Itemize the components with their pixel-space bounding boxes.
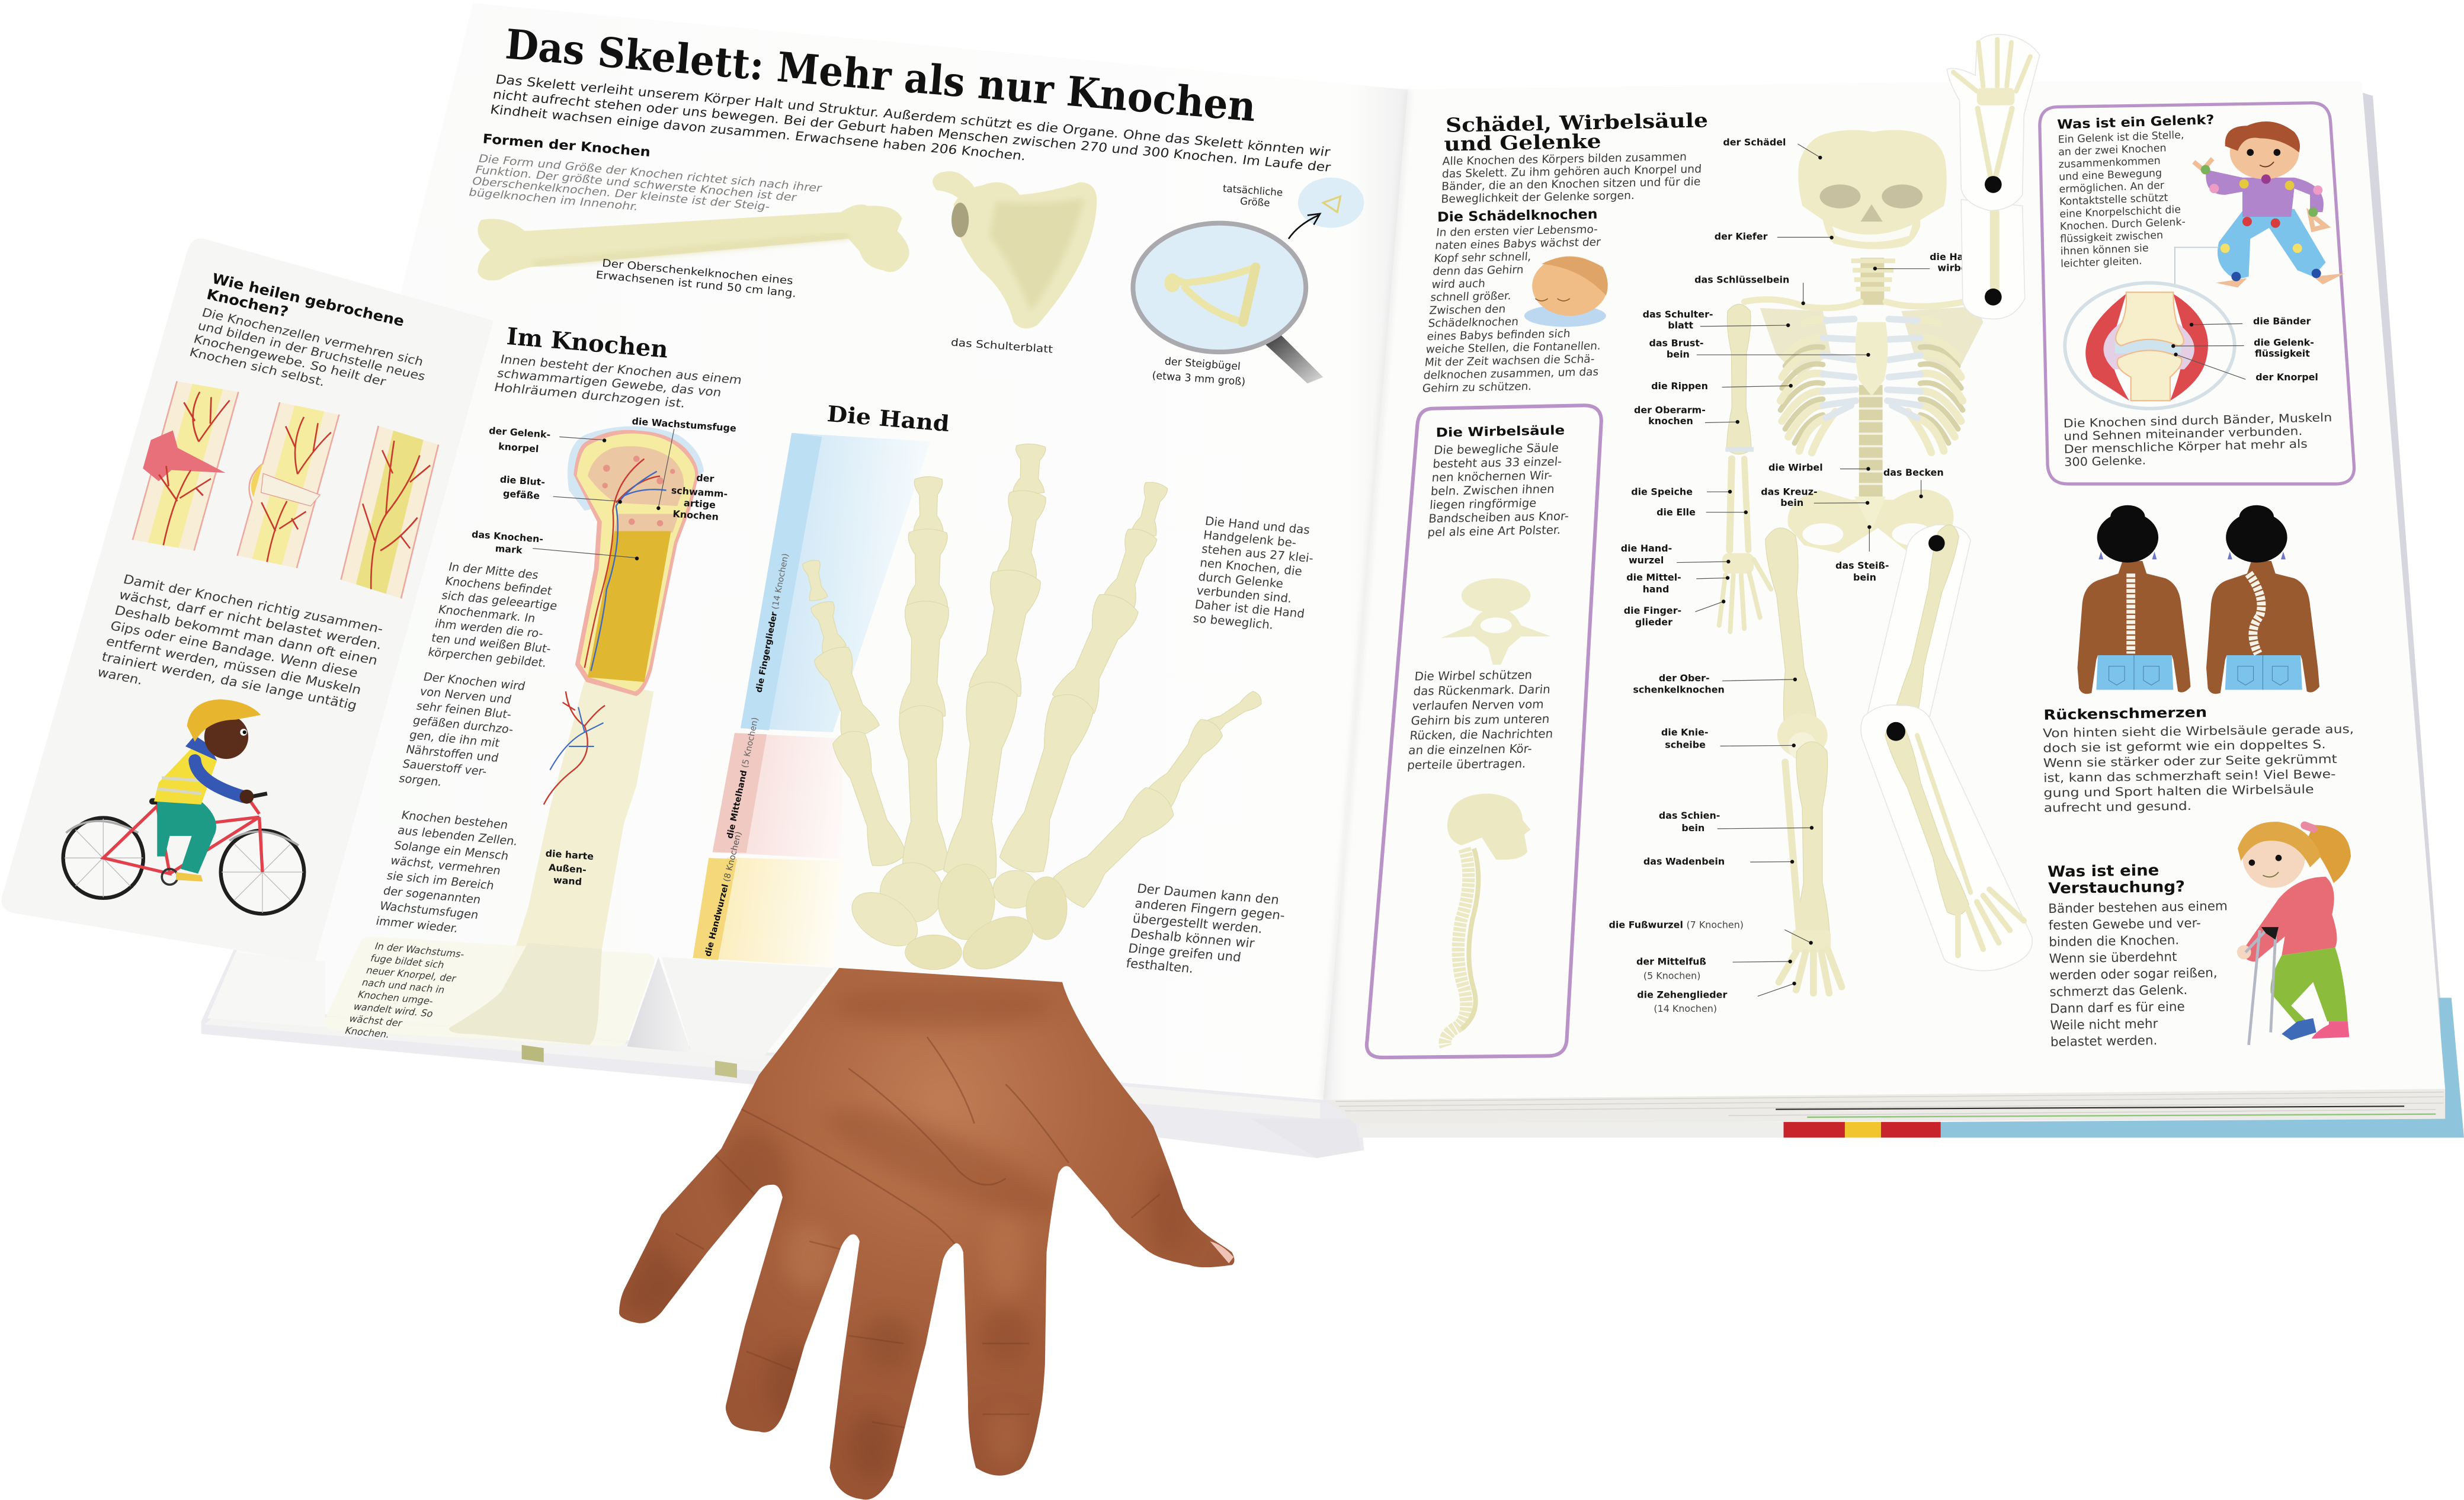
blood vessels in head xyxy=(585,459,660,668)
colour bands: hand regions xyxy=(693,433,930,966)
heading: Schädel, Wirbelsäule und Gelenke: Schädel, Wirbelsäule xyxy=(1446,108,1708,137)
text: Die Schädelknochen: delknochen zusammen, um das xyxy=(1423,366,1599,382)
joint labels xyxy=(2171,316,2318,383)
text: verlaufen Nerven vom xyxy=(1412,697,1545,713)
text: Knochenmark xyxy=(427,560,569,670)
text: Rückenschmerzen: aufrecht und gesund. xyxy=(2044,799,2191,815)
text: pel als eine Art Polster. xyxy=(1427,523,1561,539)
skeleton labels: das Schlüsselbein xyxy=(1694,274,1789,285)
text: perteile übertragen. xyxy=(1406,757,1526,772)
text: das Rückenmark. Darin xyxy=(1413,682,1551,698)
text: Verstauchung: festen Gewebe und ver- xyxy=(2049,916,2201,933)
text: ermöglichen. An der xyxy=(2059,180,2165,195)
heading: Was ist eine Verstauchung: Was ist eine xyxy=(2048,861,2159,881)
text: Die Knochen sind durch Bänder, Muskeln xyxy=(2063,411,2332,430)
text xyxy=(2063,411,2333,469)
text: Nerven: Nährstoffen und xyxy=(405,742,500,765)
arrow to actual size xyxy=(1289,214,1320,239)
after-care text: waren. xyxy=(95,665,145,688)
flap: Wie heilen gebrochene Knochen xyxy=(1,238,494,963)
pelvis xyxy=(1788,489,1953,553)
text: Verstauchung: belastet werden. xyxy=(2050,1033,2158,1050)
bone: femur xyxy=(478,204,909,280)
movable flaps: leg xyxy=(1861,523,2032,971)
text: Die Hand und das Handgelenk: nen Knochen, die xyxy=(1199,556,1303,578)
cyclist illustration xyxy=(63,699,304,914)
clavicle xyxy=(1744,299,1965,308)
text: Die Schädelknochen: weiche Stellen, die Fontanellen. xyxy=(1425,340,1601,356)
healing stage 2 xyxy=(230,400,342,569)
text: lebende Zellen: Wachstumsfugen xyxy=(378,899,480,922)
skeleton labels: bein xyxy=(1667,349,1690,360)
pull tab with bone: nach und nach in xyxy=(360,977,447,995)
text xyxy=(1406,668,1558,772)
text: Die Hand und das Handgelenk: durch Gelenke xyxy=(1197,570,1284,591)
heading: Rückenschmerzen: Rückenschmerzen xyxy=(2043,704,2207,723)
text: nen knöchernen Wir- xyxy=(1431,469,1553,485)
text: Knochenmark: sich das geleeartige xyxy=(440,588,559,613)
text: Verstauchung: Bänder bestehen aus einem xyxy=(2048,899,2228,916)
outer bone edge xyxy=(573,430,698,696)
skeleton xyxy=(1719,130,1983,993)
pants xyxy=(157,802,216,874)
text: lebende Zellen: Solange ein Mensch xyxy=(393,838,510,863)
skeleton labels xyxy=(1609,136,1976,1014)
joint labels: die Bänder xyxy=(2253,316,2311,327)
text: an der zwei Knochen xyxy=(2058,142,2167,158)
healing text: und bilden in der Bruchstelle neues xyxy=(196,319,427,383)
skeleton labels: die Hals- xyxy=(1930,251,1976,262)
arm xyxy=(195,761,243,797)
text: lebende Zellen: Knochen bestehen xyxy=(400,808,510,832)
healing stage 1 xyxy=(123,380,248,552)
text: Knochenmark: ten und weißen Blut- xyxy=(430,631,552,656)
text: Alle Knochen: das Skelett. Zu ihm gehören auch Knorpel und xyxy=(1442,163,1702,181)
bone shaft xyxy=(449,680,653,1045)
labels: hand regions: die Fingerglieder (14 Knochen) xyxy=(754,553,791,693)
text: Die Hand und das Handgelenk: so beweglich. xyxy=(1193,611,1274,632)
skeleton labels: schenkelknochen xyxy=(1633,684,1725,695)
book cover and page stack: left xyxy=(201,949,1364,1158)
text: liegen ringförmige xyxy=(1429,496,1537,512)
after-care text: trainiert werden, da sie lange untätig xyxy=(100,649,358,713)
title: Das Skelett: Mehr als nur Knochen xyxy=(504,20,1258,131)
text: Die Hand und das Handgelenk xyxy=(1193,514,1318,634)
labels: bone cross section: mark xyxy=(495,543,523,556)
caption: femur: Der Oberschenkelknochen eines xyxy=(601,258,793,287)
text: Verstauchung: Dann darf es für eine xyxy=(2050,999,2185,1017)
text: Formen der Knochen: bügelknochen im Innenohr. xyxy=(467,187,640,213)
sternum xyxy=(1856,322,1888,396)
yellow layer xyxy=(576,434,695,691)
text: lebende Zellen: aus lebenden Zellen. xyxy=(396,823,519,848)
text: lebende Zellen: sie sich im Bereich xyxy=(386,868,495,892)
heading: Die Wirbelsäule xyxy=(1436,423,1565,440)
skeleton labels: bein xyxy=(1780,497,1803,508)
skeleton labels: die Elle xyxy=(1656,507,1696,518)
text: Verstauchung xyxy=(2048,899,2230,1050)
pull tab with bone xyxy=(325,937,655,1047)
actual-size circle with stapes xyxy=(1298,178,1364,228)
vertebra xyxy=(1441,578,1551,665)
text: lebende Zellen: wächst, vermehren xyxy=(389,854,502,877)
text: eine Knorpelschicht die xyxy=(2059,204,2181,220)
text: lebende Zellen: immer wieder. xyxy=(374,914,460,935)
cartilage cap xyxy=(568,426,704,511)
illustration: back straight spine xyxy=(2078,505,2190,694)
pull tab with bone: fuge bildet sich xyxy=(369,953,446,970)
text: Nerven: gen, die ihn mit xyxy=(408,728,501,750)
text: Alle Knochen: Beweglichkeit der Gelenke sorgen. xyxy=(1441,190,1635,206)
text: Knochen. Durch Gelenk- xyxy=(2060,216,2186,233)
text: Die Schädelknochen: Zwischen den xyxy=(1429,303,1506,317)
text: an die einzelnen Kör- xyxy=(1408,742,1533,757)
text: Nerven: sorgen. xyxy=(398,771,443,789)
text: Alle Knochen: Alle Knochen des Körpers bilden zusammen xyxy=(1442,151,1687,168)
skeleton labels: die Speiche xyxy=(1631,486,1693,498)
text: Rückenschmerzen: ist, kann das schmerzhaft sein! Viel Bewe- xyxy=(2043,767,2336,785)
healing stage 3 xyxy=(341,426,438,598)
labels: bone cross section: knorpel xyxy=(498,441,539,454)
text: Nerven: von Nerven und xyxy=(418,684,513,707)
left arm xyxy=(1726,305,1751,454)
skeleton labels: die Finger- xyxy=(1624,605,1681,616)
text: Nerven: gefäßen durchzo- xyxy=(412,713,515,736)
text: Verstauchung: werden oder sogar reißen, xyxy=(2049,966,2218,983)
left leg xyxy=(1763,526,1818,735)
icon: baby head xyxy=(1524,256,1608,327)
text: Knochenmark: körperchen gebildet. xyxy=(427,645,548,670)
skeleton labels: der Mittelfuß xyxy=(1636,956,1706,967)
vest xyxy=(154,746,217,805)
palm creases xyxy=(739,1037,1069,1249)
text: Verstauchung: Weile nicht mehr xyxy=(2050,1017,2158,1033)
text: Formen der Knochen: Oberschenkelknochen. Der kleinste ist der Steig- xyxy=(470,175,771,213)
text: Knochenmark: Knochenmark. In xyxy=(437,602,537,625)
text: Im Knochen xyxy=(493,352,744,415)
text: Die Schädelknochen: eines Babys befinden sich xyxy=(1427,328,1571,343)
skin shading xyxy=(621,983,1193,1480)
text: und eine Bewegung xyxy=(2059,168,2162,183)
skeleton labels: das Wadenbein xyxy=(1643,855,1725,867)
book cover edge: right xyxy=(1359,91,2464,1137)
skeleton labels: das Kreuz- xyxy=(1761,486,1818,498)
text: Der Daumen xyxy=(1125,882,1288,983)
skeleton labels: (5 Knochen) xyxy=(1643,970,1700,981)
skeleton labels: das Schien- xyxy=(1659,810,1720,821)
text: Die Schädelknochen: Mit der Zeit wachsen die Schä- xyxy=(1424,353,1595,369)
caption: femur xyxy=(595,258,797,300)
text: Nerven: sehr feinen Blut- xyxy=(415,699,513,722)
marrow xyxy=(588,531,671,682)
skeleton labels: hand xyxy=(1643,584,1669,595)
skeleton labels: die Zehenglieder xyxy=(1637,989,1727,1000)
panel: bone cross section xyxy=(449,426,704,1045)
pull tab with bone: Knochen umge- xyxy=(356,989,435,1007)
text: Ein Gelenk ist die Stelle, xyxy=(2058,129,2184,146)
label: tatsächliche Größe: tatsächliche xyxy=(1222,182,1283,198)
text: Der Daumen: übergestellt werden. xyxy=(1132,911,1264,937)
skeleton labels: blatt xyxy=(1668,319,1693,331)
text: Alle Knochen: Bänder, die an den Knochen sitzen und für die xyxy=(1441,176,1701,193)
text: Die Hand und das Handgelenk: verbunden sind. xyxy=(1196,584,1293,605)
skeleton labels: das Schulter- xyxy=(1643,309,1713,320)
joint labels: der Knorpel xyxy=(2255,371,2318,383)
text: Im Knochen: schwammartigen Gewebe, das von xyxy=(496,366,723,399)
text: Nerven: Der Knochen wird xyxy=(422,670,527,693)
text: Rückenschmerzen: doch sie ist geformt wie ein doppeltes S. xyxy=(2043,737,2326,755)
text: Rückenschmerzen: Wenn sie stärker oder zur Seite gekrümmt xyxy=(2043,752,2337,770)
text: Knochenmark: Knochens befindet xyxy=(444,574,553,598)
text: flüssigkeit zwischen xyxy=(2060,229,2163,245)
left book page xyxy=(223,3,1408,1100)
skeleton labels: wirbel xyxy=(1937,262,1970,274)
panel: Die Wirbelsäule xyxy=(1367,405,1601,1057)
skeleton labels: das Steiß- xyxy=(1835,560,1889,571)
text: Der Daumen: festhalten. xyxy=(1125,956,1194,976)
text: Verstauchung: schmerzt das Gelenk. xyxy=(2049,983,2187,1000)
skeleton labels: (14 Knochen) xyxy=(1654,1003,1717,1014)
label: die harte Außenwand xyxy=(545,848,594,887)
pull tab with bone: wächst der xyxy=(348,1013,404,1029)
label: die harte Außenwand: wand xyxy=(553,874,582,887)
text: Die Hand und das Handgelenk: Handgelenk be- xyxy=(1203,528,1297,550)
vessels on shaft xyxy=(544,691,605,805)
labels: bone cross section: gefäße xyxy=(502,488,540,501)
pull tab with bone: Knochen. xyxy=(343,1025,392,1040)
hand cut-out xyxy=(619,968,1234,1500)
text: Die Schädelknochen: In den ersten vier Lebensmo- xyxy=(1436,223,1598,239)
text: zusammenkommen xyxy=(2058,155,2161,171)
connector line to joint xyxy=(2175,247,2219,284)
text: 300 Gelenke. xyxy=(2064,454,2146,469)
healing text: Die Knochenzellen vermehren sich xyxy=(200,306,425,369)
skeleton labels: die Wirbel xyxy=(1768,462,1823,473)
text: Im Knochen: Hohlräumen durchzogen ist. xyxy=(493,380,687,411)
text: Gehirn bis zum unteren xyxy=(1411,712,1550,727)
skeleton labels: wurzel xyxy=(1629,555,1664,566)
text: Kontaktstelle schützt xyxy=(2059,192,2168,208)
heading: Was ist eine Verstauchung: Verstauchung? xyxy=(2048,878,2185,898)
text: Der Daumen: Der Daumen kann den xyxy=(1136,882,1280,908)
text: Rückenschmerzen: Von hinten sieht die Wirbelsäule gerade aus, xyxy=(2043,722,2354,741)
pull tab with bone: wandelt wird. So xyxy=(352,1001,435,1020)
text: Nerven xyxy=(398,670,527,794)
text: Formen der Knochen xyxy=(467,153,824,229)
text: Die Hand und das Handgelenk: stehen aus 27 klei- xyxy=(1201,542,1314,565)
text: beln. Zwischen ihnen xyxy=(1430,482,1555,498)
label: der Steigbügel: (etwa 3 mm groß) xyxy=(1152,370,1246,388)
skull xyxy=(1798,130,1947,249)
healing text: Knochen sich selbst. xyxy=(188,345,327,389)
labels: bone cross section: die Blut- xyxy=(499,473,546,488)
intro text: Kindheit wachsen einige davon zusammen. Erwachsene haben 206 Knochen. xyxy=(489,102,1027,163)
text: Die Schädelknochen xyxy=(1422,223,1612,395)
hand slot fold xyxy=(207,952,834,1060)
labels: bone cross section xyxy=(471,415,737,560)
labels: bone cross section: die Wachstumsfuge xyxy=(632,415,737,434)
head xyxy=(185,735,217,761)
heading: Was ist eine Verstauchung xyxy=(2048,861,2185,898)
text: Rückenschmerzen: gung und Sport halten die Wirbelsäule xyxy=(2043,782,2314,800)
text: Der Daumen: anderen Fingern gegen- xyxy=(1134,896,1286,924)
text: Die Hand und das Handgelenk: Die Hand und das xyxy=(1204,514,1310,537)
skull and spine side view xyxy=(1445,793,1530,1047)
text: Verstauchung: Wenn sie überdehnt xyxy=(2049,950,2177,966)
text: Nerven: Sauerstoff ver- xyxy=(401,757,488,778)
text: Verstauchung: binden die Knochen. xyxy=(2049,933,2179,950)
skeleton labels: knochen xyxy=(1648,415,1693,427)
after-care text: Deshalb bekommt man dann oft einen xyxy=(113,603,379,668)
text: Bandscheiben aus Knor- xyxy=(1428,509,1569,525)
after-care text: wächst, darf er nicht belastet werden. xyxy=(117,588,383,653)
labels: bone cross section: schwamm- xyxy=(671,485,728,500)
intro text: nicht aufrecht stehen oder uns bewegen. Bei der Geburt haben Menschen zwischen 270 und 300 Knochen. Im Laufe der xyxy=(492,87,1332,175)
spongy bone xyxy=(588,446,684,506)
labels: bone cross section: Knochen xyxy=(672,508,719,523)
skeleton labels: der Kiefer xyxy=(1715,230,1768,242)
skeleton labels: der Oberarm- xyxy=(1634,405,1706,416)
text: Die Schädelknochen: denn das Gehirn xyxy=(1432,264,1524,278)
skeleton labels: die Fußwurzel (7 Knochen) xyxy=(1609,919,1744,931)
text: Die Schädelknochen: Schädelknochen xyxy=(1428,316,1519,330)
text: lebende Zellen: der sogenannten xyxy=(382,884,482,906)
text: Die Schädelknochen: wird auch xyxy=(1431,277,1486,291)
skeleton labels: die Rippen xyxy=(1651,380,1708,392)
text: Die Hand und das Handgelenk: Daher ist die Hand xyxy=(1194,598,1305,621)
labels: hand regions: die Handwurzel (8 Knochen) xyxy=(703,831,744,957)
skeleton labels: das Brust- xyxy=(1649,338,1704,349)
right book page xyxy=(1323,82,2445,1100)
text xyxy=(2058,129,2187,270)
heading: Schädel, Wirbelsäule und Gelenke xyxy=(1444,108,1708,156)
heading: Formen der Knochen: Formen der Knochen xyxy=(482,132,651,160)
skeleton labels: die Knie- xyxy=(1661,726,1709,738)
after-care text: Damit der Knochen richtig zusammen- xyxy=(121,572,385,637)
neck vertebrae xyxy=(1860,258,1884,305)
spine xyxy=(1859,385,1883,498)
skeleton labels: bein xyxy=(1853,572,1876,583)
joint illustration xyxy=(2065,283,2235,409)
labels: hand regions: die Mittelhand (5 Knochen) xyxy=(725,716,760,839)
text: Formen der Knochen: Die Form und Größe der Knochen richtet sich nach ihrer xyxy=(477,153,824,195)
text: Knochenmark: In der Mitte des xyxy=(447,560,540,582)
text: Formen der Knochen: Funktion. Der größte und schwerste Knochen ist der xyxy=(474,164,798,204)
label: der Steigbügel xyxy=(1152,355,1246,388)
after-care text: Gips oder eine Bandage. Wenn diese xyxy=(108,618,360,681)
text: Rücken, die Nachrichten xyxy=(1409,727,1553,742)
skeleton labels: der Ober- xyxy=(1659,672,1710,684)
skeleton labels: der Schädel xyxy=(1723,136,1786,148)
skeleton labels: die Mittel- xyxy=(1626,572,1681,583)
heading: Wie heilen gebrochene xyxy=(210,270,406,330)
intro text: Das Skelett verleiht unserem Körper Halt und Struktur. Außerdem schützt es die Organe. Ohne das Skelett könnten wir xyxy=(495,72,1332,159)
text: Die Schädelknochen: naten eines Babys wächst der xyxy=(1434,236,1601,252)
heading: Die Schädelknochen: Die Schädelknochen xyxy=(1437,207,1598,225)
caption: femur: Erwachsenen ist rund 50 cm lang. xyxy=(595,270,797,300)
text: Der Daumen: Dinge greifen und xyxy=(1127,941,1242,965)
scapula xyxy=(1760,306,1983,377)
text: Die Schädelknochen: Kopf sehr schnell, xyxy=(1433,251,1531,265)
illustration: back curved spine xyxy=(2206,505,2319,694)
after-care text: entfernt werden, müssen die Muskeln xyxy=(104,634,363,698)
label: tatsächliche Größe xyxy=(1222,182,1283,209)
healing text: Knochengewebe. So heilt der xyxy=(192,332,388,389)
labels: bone cross section: der Gelenk- xyxy=(489,425,551,440)
text: Knochenmark: ihm werden die ro- xyxy=(434,617,544,640)
labels: bone cross section: das Knochen- xyxy=(471,528,544,545)
skeleton labels: bein xyxy=(1681,822,1704,834)
label: tatsächliche Größe: Größe xyxy=(1239,195,1270,209)
gutter shadow xyxy=(1323,89,1408,1100)
text: Alle Knochen xyxy=(1441,150,1702,206)
pull tab with bone: neuer Knorpel, der xyxy=(365,964,458,984)
label: der Steigbügel: der Steigbügel xyxy=(1164,355,1241,373)
pull tab with bone: In der Wachstums- xyxy=(373,941,466,960)
text: ihnen können sie xyxy=(2061,242,2149,258)
skeleton labels: das Becken xyxy=(1883,467,1944,478)
illustration: girl on crutches xyxy=(2237,820,2351,1045)
text: Die Wirbel schützen xyxy=(1414,668,1533,683)
intro text xyxy=(489,72,1335,190)
text xyxy=(1427,441,1575,539)
text: Im Knochen: Innen besteht der Knochen aus einem xyxy=(499,352,744,387)
text: Die Schädelknochen: Gehirn zu schützen. xyxy=(1422,380,1532,395)
text: Der Daumen: Deshalb können wir xyxy=(1129,926,1255,951)
text: und Sehnen miteinander verbunden. xyxy=(2064,424,2303,443)
text: besteht aus 33 einzel- xyxy=(1433,454,1562,471)
after-care text xyxy=(95,572,388,730)
bone: shoulder blade xyxy=(933,171,1097,329)
joint labels: die Gelenk- xyxy=(2254,337,2314,348)
skeleton labels: die Hand- xyxy=(1621,543,1672,554)
healing text xyxy=(188,306,431,410)
joint labels: flüssigkeit xyxy=(2255,348,2310,359)
heading: Knochen? xyxy=(205,286,290,320)
label: die harte Außenwand: Außen- xyxy=(548,861,587,876)
hand skeleton xyxy=(802,443,1264,980)
heading: Die Hand: Die Hand xyxy=(826,400,950,437)
skeleton labels: scheibe xyxy=(1665,739,1706,751)
heading: Im Knochen: Im Knochen xyxy=(505,323,669,364)
ribs side xyxy=(1780,319,1856,453)
labels: bone cross section: artige xyxy=(684,497,716,511)
page stack: right xyxy=(1323,1087,2445,1123)
heading: Schädel, Wirbelsäule und Gelenke: und Gelenke xyxy=(1444,130,1601,156)
text: lebende Zellen xyxy=(374,808,523,939)
labels: bone cross section: der xyxy=(696,472,714,485)
text: Rückenschmerzen xyxy=(2043,722,2355,815)
text: leichter gleiten. xyxy=(2061,255,2142,270)
skeleton labels: glieder xyxy=(1635,617,1672,628)
text: Die Schädelknochen: schnell größer. xyxy=(1430,290,1512,304)
magnifying glass with stapes xyxy=(1133,223,1323,383)
text: Die bewegliche Säule xyxy=(1433,441,1559,457)
movable flaps: arm xyxy=(1947,34,2040,319)
boy illustration xyxy=(2194,121,2344,287)
caption: shoulder blade: das Schulterblatt xyxy=(950,337,1053,356)
text: Der menschliche Körper hat mehr als xyxy=(2064,437,2308,456)
panel: Was ist ein Gelenk xyxy=(2040,103,2354,484)
labels: hand regions xyxy=(703,553,791,957)
heading: Was ist ein Gelenk? xyxy=(2057,113,2215,132)
label: die harte Außenwand: die harte xyxy=(545,848,594,862)
